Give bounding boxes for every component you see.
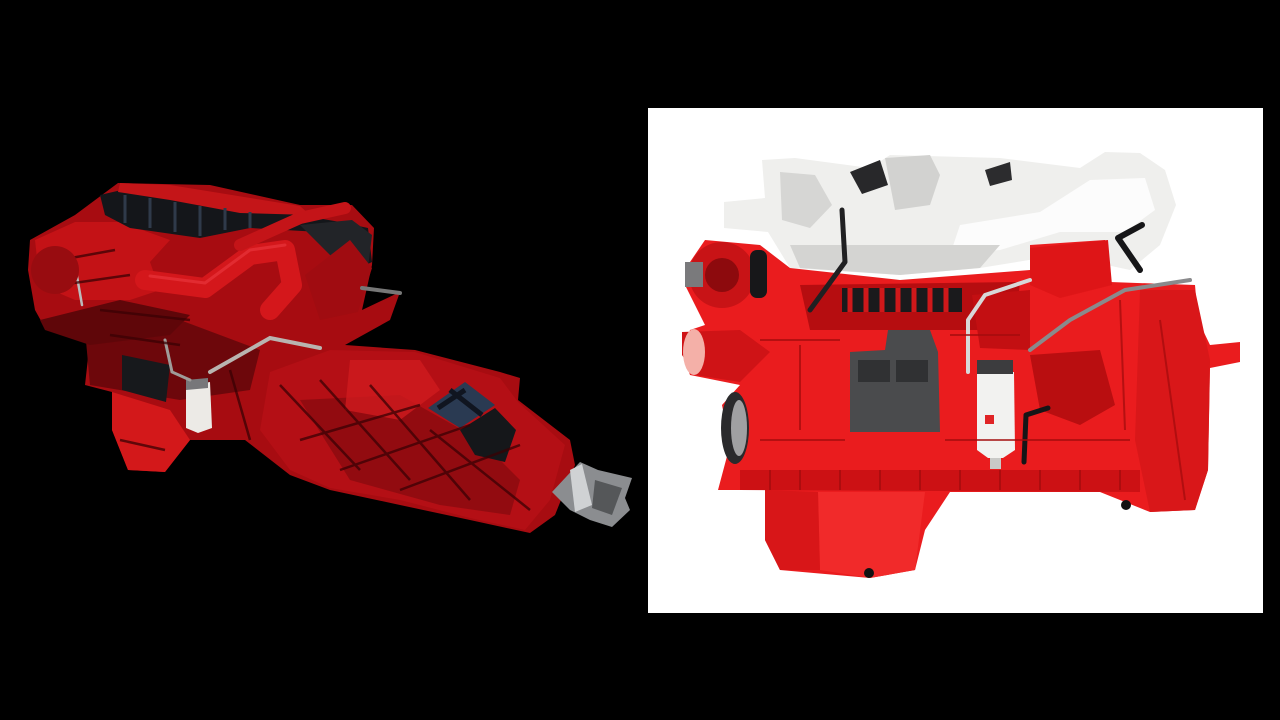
right engine drain plugs	[864, 500, 1131, 578]
left alternator	[31, 246, 79, 294]
left engine hoses	[75, 265, 400, 380]
left engine bracket	[305, 240, 372, 320]
right engine front pulley	[683, 329, 749, 464]
right engine fuel filter	[977, 360, 1015, 469]
left engine surface detail	[60, 250, 530, 510]
right engine injector rail	[842, 288, 962, 312]
left engine with transmission	[28, 183, 632, 533]
left engine dark control unit	[122, 355, 170, 402]
right engine hoses	[810, 210, 1190, 462]
panel: white photo background	[648, 108, 1263, 613]
left engine main block	[28, 183, 575, 533]
right engine white turbo and manifold	[724, 152, 1176, 275]
left transmission top cover	[428, 382, 516, 462]
left engine intake pipes	[145, 208, 345, 310]
left engine white filter	[186, 378, 212, 433]
right engine surface detail	[760, 300, 1185, 500]
right engine	[682, 152, 1240, 578]
right engine red body	[682, 240, 1240, 578]
left output flange	[552, 462, 632, 527]
right engine control module	[850, 330, 940, 432]
left engine dark cylinder head	[100, 183, 372, 275]
right engine alternator	[685, 242, 767, 308]
